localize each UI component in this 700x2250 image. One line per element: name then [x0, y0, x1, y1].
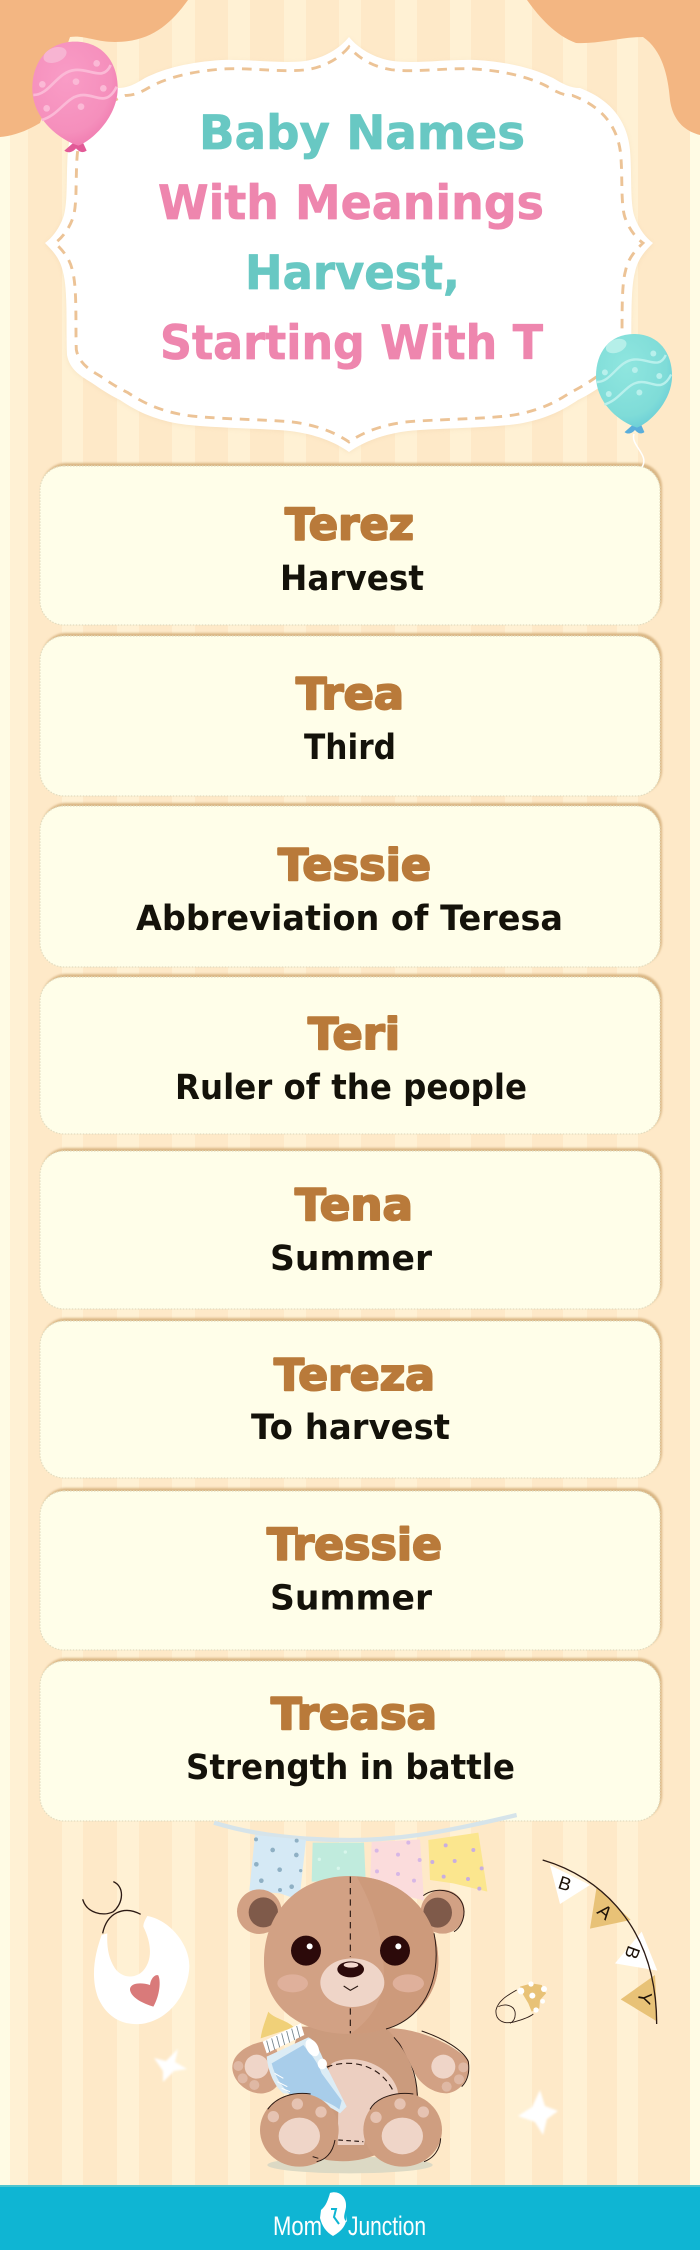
bottle	[261, 2012, 347, 2113]
logo: MomJunction: Mom	[273, 2211, 322, 2241]
flag: B: B	[621, 1943, 645, 1962]
icon: blue balloon	[596, 334, 672, 467]
card: Tessie	[40, 803, 662, 967]
bib strings	[83, 1882, 141, 1933]
card: Trea: Third	[304, 728, 396, 768]
head	[264, 1876, 438, 2034]
title: Starting With T	[160, 316, 543, 371]
card: Tressie: Tressie	[267, 1520, 442, 1570]
icon: star right	[518, 2090, 558, 2135]
flag: yellow	[428, 1833, 487, 1892]
flag: A	[590, 1887, 631, 1929]
logo: MomJunction	[273, 2192, 426, 2241]
card: Tereza: To harvest	[251, 1408, 450, 1448]
string	[543, 1860, 657, 2024]
shadow	[267, 2157, 433, 2173]
card: Terez	[40, 463, 662, 625]
card: Trea	[40, 633, 662, 796]
flag: B	[550, 1865, 590, 1904]
card: Tressie	[40, 1488, 662, 1650]
flag: Y	[621, 1975, 657, 2022]
curtain: top right	[527, 0, 700, 135]
title: With Meanings	[158, 176, 544, 231]
flag: B: B	[556, 1872, 574, 1895]
card: Tena	[40, 1148, 662, 1309]
flag: pink	[370, 1839, 424, 1901]
left arm	[232, 2040, 283, 2093]
title: Baby Names	[199, 106, 525, 161]
card: Tressie: Summer	[270, 1578, 433, 1618]
title plaque	[45, 37, 653, 453]
icon: safety pin	[496, 1981, 547, 2023]
body	[289, 2027, 418, 2161]
card: Terez: Terez	[285, 500, 414, 550]
card: Teri: Ruler of the people	[175, 1068, 527, 1108]
logo: MomJunction: Junction	[348, 2211, 426, 2241]
card: Trea: Trea	[296, 669, 404, 720]
name cards	[40, 463, 662, 1821]
card: Tereza	[40, 1318, 662, 1478]
curtain: top left	[0, 0, 188, 137]
title	[158, 106, 544, 371]
baby banner	[543, 1860, 657, 2024]
flag: mint	[312, 1843, 366, 1882]
bunting flags	[214, 1815, 517, 1901]
card: Treasa	[40, 1658, 662, 1821]
card: Treasa: Strength in battle	[186, 1748, 515, 1788]
card: Tessie: Tessie	[278, 840, 431, 891]
flag: blue	[249, 1835, 306, 1900]
card: Tena: Summer	[270, 1239, 433, 1279]
flag: Y: Y	[633, 1990, 656, 2007]
card: Tereza: Tereza	[274, 1350, 435, 1401]
icon: star left	[154, 2049, 187, 2082]
right arm	[387, 2028, 469, 2093]
card: Tena: Tena	[295, 1180, 413, 1231]
footer bar	[0, 2185, 700, 2250]
flag: A: A	[593, 1900, 617, 1924]
card: Teri: Teri	[308, 1009, 400, 1060]
card: Terez: Harvest	[280, 559, 424, 599]
icon: pink balloon	[32, 42, 118, 152]
logo figure	[320, 2192, 347, 2236]
illustration: teddy bear with bottle	[232, 1876, 469, 2173]
heart	[130, 1975, 160, 2007]
flag: B	[615, 1932, 657, 1971]
card: Tessie: Abbreviation of Teresa	[136, 899, 563, 939]
ears	[237, 1889, 465, 1934]
feet	[260, 2093, 442, 2167]
card: Treasa: Treasa	[271, 1689, 437, 1740]
icon: baby bib	[83, 1882, 189, 2024]
card: Teri	[40, 974, 662, 1134]
title: Harvest,	[245, 246, 460, 301]
